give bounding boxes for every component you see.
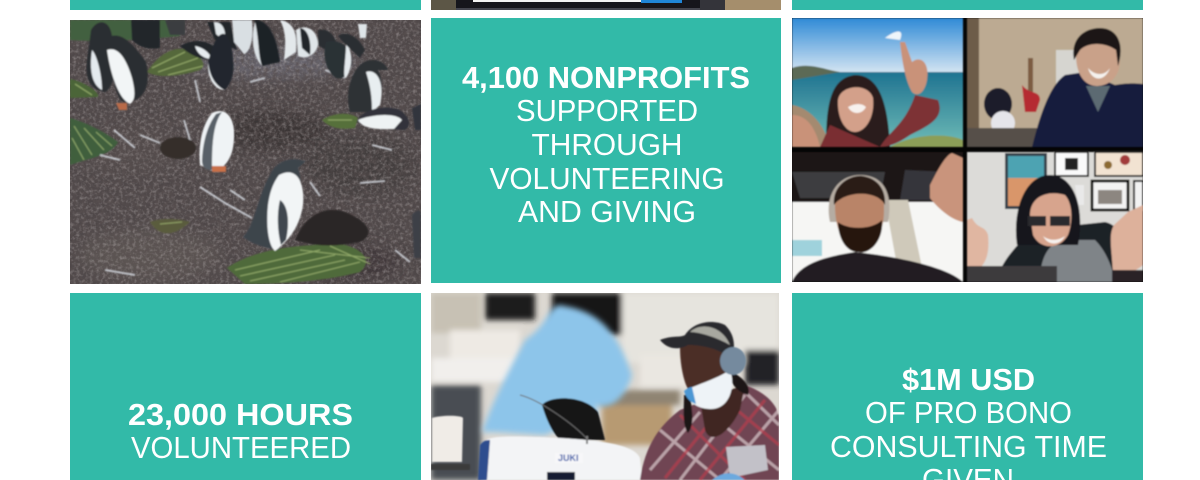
tile: 4,100 nonprofits stat: 4,100 NONPROFITS bbox=[462, 60, 750, 95]
woman: hair and face bbox=[826, 75, 890, 147]
thread spool bbox=[432, 416, 463, 462]
photo: penguin colony bbox=[70, 20, 421, 284]
back row penguins bbox=[131, 20, 367, 78]
worker: dreadlocks bbox=[684, 395, 692, 433]
call tile: man with headphones bbox=[792, 152, 963, 282]
tile: $1M USD stat bbox=[792, 293, 1143, 480]
call tile: woman with glasses bbox=[967, 152, 1143, 282]
tile: 23,000 hours stat bbox=[70, 293, 421, 480]
tile: $1M USD stat: CONSULTING TIME bbox=[830, 429, 1107, 464]
worker: headphone bbox=[720, 347, 746, 375]
top row: teal tile left bbox=[70, 0, 421, 10]
penguin: right standing bbox=[348, 60, 388, 112]
call tile: man with guitar bbox=[967, 18, 1143, 147]
worker: headwrap bbox=[659, 321, 735, 353]
photo: sewing worker: JUKI bbox=[558, 453, 579, 463]
tile: 4,100 nonprofits stat: SUPPORTED bbox=[516, 93, 698, 128]
penguin: lying bbox=[357, 104, 421, 130]
blue gown bbox=[482, 305, 632, 435]
penguin: far left pair bbox=[86, 22, 148, 110]
penguin: main foreground chick bbox=[243, 159, 306, 251]
tile: 23,000 hours stat: VOLUNTEERED bbox=[131, 430, 351, 465]
photo: video call grid bbox=[792, 18, 1143, 282]
tile: 4,100 nonprofits stat bbox=[431, 18, 781, 283]
top row: laptop photo strip bbox=[431, 0, 781, 10]
sewing machine bbox=[486, 437, 642, 480]
black chair bbox=[542, 398, 605, 440]
worker: face mask bbox=[684, 370, 732, 409]
top row: teal tile right bbox=[792, 0, 1143, 10]
worker: neck and head bbox=[700, 385, 745, 437]
guano streaks bbox=[100, 70, 410, 275]
worker: plaid shirt bbox=[640, 385, 779, 480]
dark burrow bbox=[295, 210, 368, 246]
tile: 4,100 nonprofits stat: AND GIVING bbox=[518, 194, 696, 229]
woman: maroon sleeve and raised hand bbox=[820, 125, 880, 147]
photo: sewing worker bbox=[431, 293, 779, 480]
tile: $1M USD stat: OF PRO BONO bbox=[865, 395, 1072, 430]
penguin: centre chick bbox=[200, 111, 234, 172]
tile: $1M USD stat: $1M USD bbox=[902, 362, 1035, 397]
tile: 23,000 hours stat: 23,000 HOURS bbox=[128, 397, 353, 432]
call tile: woman at beach bbox=[792, 18, 963, 147]
tile: 4,100 nonprofits stat: THROUGH bbox=[532, 127, 682, 162]
grass tufts bbox=[70, 20, 370, 284]
penguin: standing back bbox=[207, 34, 233, 90]
tile: 4,100 nonprofits stat: VOLUNTEERING bbox=[490, 161, 724, 196]
